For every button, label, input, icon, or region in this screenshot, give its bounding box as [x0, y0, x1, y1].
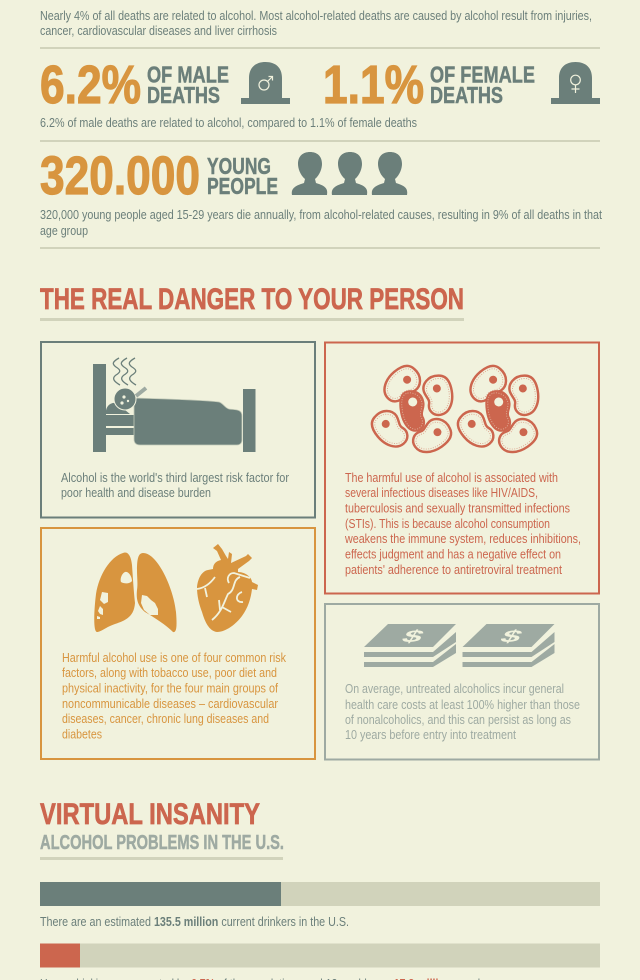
label: young people: PEOPLE: [207, 173, 278, 199]
stat: young people: 320.000: [40, 147, 200, 206]
text: noncommunicable diseases: noncommunicable diseases – cardiovascular: [62, 697, 278, 711]
text: health care costs: of nonalcoholics, and this can persist as long as: [345, 713, 571, 727]
text: young people: [40, 208, 602, 238]
stat: male deaths: 6.2%: [40, 56, 141, 115]
stat: female deaths: [323, 56, 535, 115]
panel: noncommunicable diseases: [41, 528, 315, 759]
text: infectious diseases: [344, 471, 581, 577]
icon: sick person in bed: [93, 358, 256, 452]
panel: risk factor: [41, 342, 315, 518]
text: noncommunicable diseases: diabetes: [62, 728, 102, 742]
text: infectious diseases: weakens the immune system, reduces inhibitions,: [344, 532, 581, 546]
text: infectious diseases: The harmful use of alcohol is associated with: [345, 471, 558, 485]
icon: lungs: [94, 553, 177, 632]
text: health care costs: 10 years before entry into treatment: [345, 728, 516, 742]
label: of male deaths: DEATHS: [147, 82, 220, 108]
text: health care costs: health care costs at least 100% higher than those: [345, 698, 580, 712]
label: of female deaths: DEATHS: [430, 82, 503, 108]
heading: the real danger: THE REAL DANGER TO YOUR PERSON: [40, 283, 464, 316]
icon: money stacks: [364, 624, 554, 667]
text: male vs female: 6.2% of male deaths are related to alcohol, compared to 1.1% of female deaths: [40, 116, 417, 130]
label: of female deaths: OF FEMALE: [430, 62, 535, 88]
text: health care costs: On average, untreated alcoholics incur general: [345, 682, 564, 696]
text: risk factor: poor health and disease burden: [61, 486, 211, 500]
text: noncommunicable diseases: factors, along with tobacco use, poor diet and: [62, 666, 277, 680]
bar: heavy drinking: [40, 944, 600, 968]
text: young people: age group: [40, 224, 88, 238]
icon: heart: [197, 544, 258, 632]
text: noncommunicable diseases: diseases, cancer, chronic lung diseases and: [62, 712, 269, 726]
label: young people: [207, 153, 278, 199]
subheading: alcohol problems: ALCOHOL PROBLEMS IN THE U.S.: [40, 831, 284, 854]
text: infectious diseases: effects judgment and has a negative effect on: [345, 548, 561, 562]
text: current drinkers: There are an estimated 135.5 million current drinkers in the U.S.: [40, 915, 349, 929]
stat: female deaths: 1.1%: [323, 56, 424, 115]
text: infectious diseases: tuberculosis and sexually transmitted infections: [345, 502, 570, 516]
panel: health care costs: [325, 604, 599, 760]
intro text: [40, 9, 592, 38]
bar: current drinkers: [40, 882, 600, 906]
text: infectious diseases: patients' adherence to antiretroviral treatment: [345, 563, 562, 577]
text: noncommunicable diseases: Harmful alcohol use is one of four common risk: [62, 651, 287, 665]
heading: virtual insanity: VIRTUAL INSANITY: [40, 798, 260, 831]
text: infectious diseases: several infectious diseases like HIV/AIDS,: [345, 486, 538, 500]
text: noncommunicable diseases: physical inactivity, for the four main groups of: [62, 682, 278, 696]
label: of male deaths: [147, 62, 229, 108]
stat: male deaths: [40, 56, 229, 115]
label: of female deaths: [430, 62, 535, 108]
text: risk factor: [61, 471, 289, 500]
label: young people: YOUNG: [207, 153, 271, 179]
intro text: cancer, cardiovascular diseases and liver cirrhosis: [40, 24, 277, 38]
icon: three people: [292, 152, 407, 195]
icon: male tombstone: [241, 62, 290, 104]
text: health care costs: [345, 682, 580, 742]
text: noncommunicable diseases: [62, 651, 287, 742]
icon: cells: [367, 361, 542, 459]
panel: infectious diseases: [325, 342, 599, 594]
icon: female tombstone: [551, 62, 600, 104]
text: risk factor: Alcohol is the world's third largest risk factor for: [61, 471, 289, 485]
label: of male deaths: OF MALE: [147, 62, 229, 88]
text: infectious diseases: (STIs). This is because alcohol consumption: [345, 517, 550, 531]
